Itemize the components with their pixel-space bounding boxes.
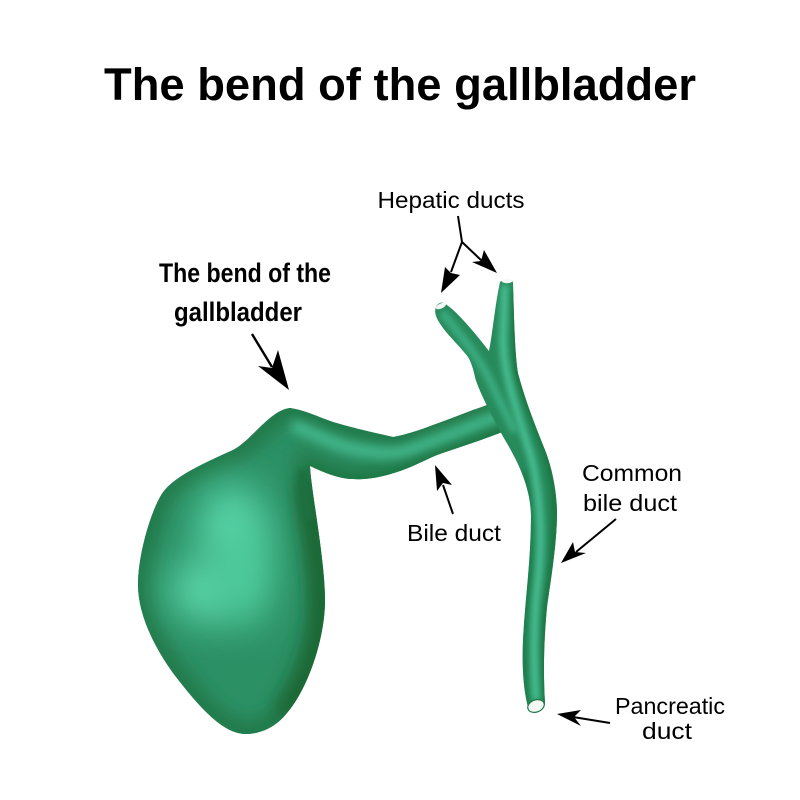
label: common bile duct: Common — [582, 460, 682, 486]
duct highlights — [503, 285, 540, 700]
arrow: bile duct — [435, 465, 453, 514]
label: the bend of the gallbladder: gallbladder — [174, 297, 302, 327]
label: bile duct: Bile duct — [407, 520, 502, 546]
neck shadow — [302, 470, 308, 520]
duct highlight — [292, 413, 505, 453]
body highlights — [198, 483, 266, 567]
label: common bile duct — [582, 460, 682, 516]
title: The bend of the gallbladder — [104, 59, 696, 110]
gallbladder diagram — [138, 279, 557, 734]
label: pancreatic duct: duct — [642, 718, 693, 744]
arrow: common bile duct — [561, 519, 616, 563]
label: the bend of the gallbladder — [159, 258, 331, 327]
label: pancreatic duct: Pancreatic — [615, 693, 725, 719]
arrows: hepatic ducts — [441, 216, 497, 293]
label: common bile duct: bile duct — [583, 490, 678, 516]
common duct shadow edge — [514, 290, 555, 705]
hepatic and common bile ducts — [435, 280, 557, 706]
arrow: pancreatic duct — [557, 710, 610, 726]
gallbladder body and bile duct — [138, 405, 501, 734]
arrow: to the bend — [252, 334, 289, 390]
duct openings — [502, 279, 512, 283]
bile duct lower shadow — [312, 431, 505, 478]
label: hepatic ducts: Hepatic ducts — [378, 187, 524, 213]
right side shadow — [282, 480, 321, 715]
label: pancreatic duct — [615, 693, 725, 744]
label: the bend of the gallbladder: The bend of the — [159, 258, 331, 288]
